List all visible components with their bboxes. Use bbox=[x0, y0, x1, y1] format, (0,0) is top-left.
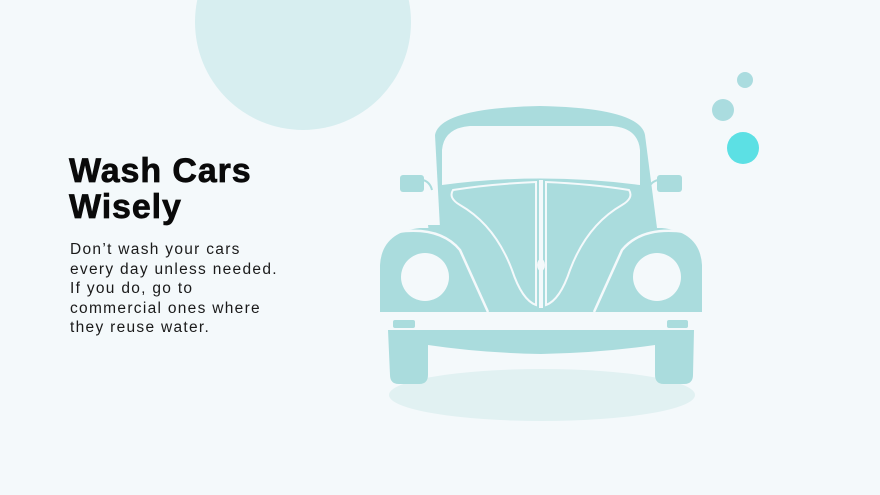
headlights bbox=[401, 253, 449, 301]
fender separator lines bbox=[397, 231, 488, 312]
title: Wisely bbox=[69, 188, 182, 226]
body text: commercial ones where bbox=[70, 300, 261, 317]
body text: If you do, go to bbox=[70, 280, 193, 297]
body text bbox=[70, 241, 278, 336]
mirrors bbox=[400, 175, 424, 192]
background circle bbox=[195, 0, 411, 130]
bumper and legs bbox=[388, 330, 694, 384]
body text: they reuse water. bbox=[70, 319, 210, 336]
title bbox=[68, 152, 252, 226]
bubbles bbox=[712, 72, 759, 164]
car shadow bbox=[389, 369, 695, 421]
hood panels bbox=[452, 182, 536, 305]
bumper small rects bbox=[393, 320, 415, 328]
title: Wash Cars bbox=[69, 152, 252, 190]
car bbox=[380, 106, 702, 384]
fenders bbox=[380, 228, 470, 312]
body text: every day unless needed. bbox=[70, 261, 278, 278]
body text: Don’t wash your cars bbox=[70, 241, 241, 258]
body bbox=[435, 106, 657, 228]
windshield bbox=[442, 126, 640, 185]
